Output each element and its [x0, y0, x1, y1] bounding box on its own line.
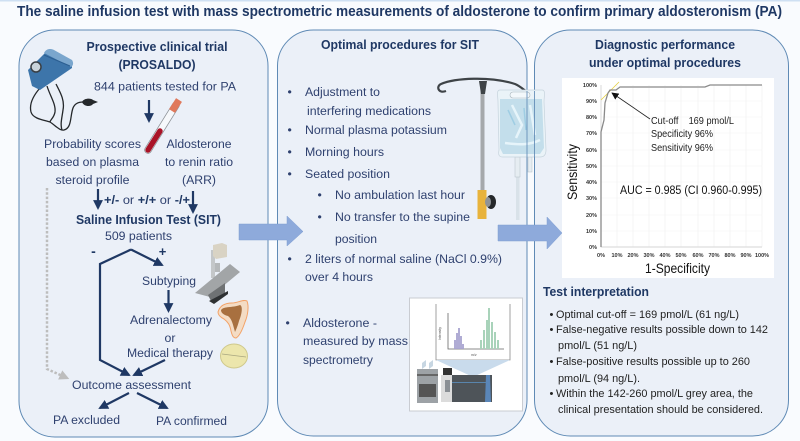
arrow: from trial to procedures	[239, 216, 303, 246]
callout: cut-off values: Cut-off 169 pmol/L	[651, 115, 734, 127]
y axis tick labels: 40%	[586, 180, 597, 186]
arrow: scores to SIT	[97, 189, 99, 208]
icon: imaging scanner table	[195, 243, 240, 304]
arrow: from procedures to performance	[498, 217, 562, 249]
list: mass spectrometry: measured by mass	[303, 334, 408, 348]
text: PA confirmed: PA confirmed	[156, 414, 227, 428]
icon: mass spectrometer and spectrum: Intensity	[438, 327, 442, 340]
text: aldosterone to renin ratio: (ARR)	[182, 173, 216, 187]
y axis tick labels: 10%	[586, 229, 597, 235]
list: test interpretation: •	[550, 388, 554, 400]
list: test interpretation: Within the 142-260 pmol/L grey area, the	[556, 388, 753, 400]
y axis tick labels: 50%	[586, 164, 597, 170]
text: probability scores: steroid profile	[56, 173, 130, 187]
text: probability scores: Probability scores	[44, 137, 141, 151]
list: mass spectrometry: •	[286, 316, 290, 330]
panel: prospective clinical trial	[19, 30, 268, 437]
list: procedure conditions: No ambulation last hour	[335, 188, 465, 202]
list: test interpretation: clinical presentation should be considered.	[558, 404, 763, 416]
x axis tick labels: 80%	[724, 253, 736, 259]
text: adrenalectomy or medical therapy: Adrenalectomy	[130, 313, 213, 327]
list: procedure conditions: •	[288, 123, 292, 137]
heading: prospective clinical trial: (PROSALDO)	[118, 58, 196, 72]
list: test interpretation	[550, 309, 768, 416]
list: procedure conditions: •	[318, 188, 322, 202]
x axis tick labels: 90%	[740, 253, 752, 259]
heading: prospective clinical trial: Prospective clinical trial	[86, 40, 228, 54]
text: outcome assessment: Outcome assessment	[72, 378, 192, 392]
arrow: to PA excluded	[100, 393, 129, 408]
list: procedure conditions: •	[288, 252, 292, 266]
icon: adrenal gland	[218, 300, 248, 338]
list: procedure conditions: position	[335, 232, 377, 246]
list: test interpretation: pmol/L (51 ng/L)	[558, 340, 637, 352]
list: procedure conditions: interfering medications	[307, 104, 431, 118]
ROC curve line	[601, 85, 762, 247]
text: result combinations: +/- or +/+ or -/+	[104, 193, 190, 207]
icon: IV stand and saline bag	[438, 79, 546, 220]
callout: cut-off values: Sensitivity 96%	[651, 142, 713, 154]
heading: diagnostic performance: under optimal procedures	[589, 56, 741, 70]
text: subtyping: Subtyping	[142, 274, 196, 288]
list: mass spectrometry: Aldosterone -	[303, 316, 377, 330]
list: test interpretation: •	[550, 309, 554, 321]
arrow: cut-off callout	[612, 93, 650, 119]
icon: mass spectrometer and spectrum	[410, 298, 522, 411]
list: test interpretation: Optimal cut-off = 169 pmol/L (61 ng/L)	[556, 309, 739, 321]
text: probability scores	[44, 137, 141, 187]
text: AUC: AUC = 0.985 (CI 0.960-0.995)	[620, 185, 762, 197]
heading: optimal procedures: Optimal procedures for SIT	[321, 38, 479, 52]
list: procedure conditions: over 4 hours	[305, 270, 373, 284]
x axis tick labels: 40%	[659, 253, 671, 259]
panel: optimal procedures for SIT	[278, 30, 527, 436]
heading: saline infusion test: Saline Infusion Test (SIT)	[76, 213, 221, 227]
text: minus sign: -	[91, 243, 96, 259]
list: procedure conditions: •	[288, 167, 292, 181]
arrow: SIT positive to subtyping	[131, 250, 162, 265]
list: procedure conditions	[288, 85, 502, 284]
axis label: 1-specificity: 1-Specificity	[645, 260, 710, 276]
arrow: screening negative, dotted	[47, 188, 67, 378]
heading: test interpretation: Test interpretation	[543, 284, 649, 299]
list: procedure conditions: No transfer to the supine	[335, 210, 470, 224]
tangent line at cut-off	[601, 82, 619, 100]
list: procedure conditions: 2 liters of normal saline (NaCl 0.9%)	[305, 252, 502, 266]
y axis tick labels: 20%	[586, 213, 597, 219]
arrow: SIT negative to outcome	[100, 250, 131, 375]
x axis tick labels: 50%	[675, 253, 687, 259]
callout: cut-off values	[651, 115, 734, 154]
list: procedure conditions: Morning hours	[305, 145, 384, 159]
icon: blood test tube	[148, 100, 179, 150]
text: adrenalectomy or medical therapy: Medical therapy	[127, 346, 214, 360]
text: plus sign: +	[159, 244, 167, 259]
icon: pill	[220, 344, 248, 368]
icon: mass spectrometer and spectrum: m/z	[471, 353, 477, 357]
arrow: subtyping to treatment	[167, 290, 170, 311]
y axis tick labels: 70%	[586, 131, 597, 137]
text: adrenalectomy or medical therapy: or	[165, 331, 175, 345]
text: aldosterone to renin ratio: Aldosterone	[166, 137, 232, 151]
list: mass spectrometry	[286, 316, 408, 367]
arrow: to scores	[148, 100, 150, 121]
x axis tick labels: 20%	[627, 253, 639, 259]
heading: diagnostic performance	[589, 38, 741, 70]
y axis tick labels: 90%	[586, 99, 597, 105]
chart: ROC curve	[562, 78, 774, 278]
list: procedure conditions: Adjustment to	[305, 85, 380, 99]
list: test interpretation: pmol/L (94 ng/L).	[558, 373, 640, 385]
list: mass spectrometry: spectrometry	[303, 353, 374, 367]
list: test interpretation: •	[550, 324, 554, 336]
y axis tick labels: 0%	[589, 245, 597, 251]
x axis tick labels: 60%	[692, 253, 704, 259]
callout: cut-off values: Specificity 96%	[651, 128, 713, 140]
text: adrenalectomy or medical therapy	[127, 313, 214, 360]
text: probability scores: based on plasma	[46, 155, 139, 169]
list: procedure conditions: Normal plasma potassium	[305, 123, 447, 137]
heading: prospective clinical trial	[86, 40, 228, 72]
x axis tick labels: 70%	[708, 253, 720, 259]
arrow: therapy to outcome	[134, 360, 165, 375]
x axis tick labels: 30%	[643, 253, 655, 259]
list: test interpretation: False-negative results possible down to 142	[556, 324, 768, 336]
list: procedure conditions: •	[288, 85, 292, 99]
y axis tick labels: 30%	[586, 196, 597, 202]
text: aldosterone to renin ratio	[165, 137, 233, 187]
arrow: ARR to SIT	[192, 191, 194, 212]
x axis tick labels	[597, 253, 769, 259]
text: PA excluded: PA excluded	[53, 413, 120, 427]
list: procedure conditions: •	[318, 210, 322, 224]
text: 509 patients: 509 patients	[105, 229, 172, 243]
y axis tick labels: 80%	[586, 115, 597, 121]
axis label: sensitivity: Sensitivity	[564, 144, 580, 200]
list: test interpretation: False-positive results possible up to 260	[556, 356, 750, 368]
list: procedure conditions: •	[288, 145, 292, 159]
x axis tick labels: 100%	[755, 253, 769, 259]
list: test interpretation: •	[550, 356, 554, 368]
y axis tick labels: 60%	[586, 148, 597, 154]
x axis tick labels: 0%	[597, 253, 605, 259]
icon: blood pressure cuff	[28, 49, 98, 130]
y axis tick labels	[583, 83, 597, 251]
text: aldosterone to renin ratio: to renin ratio	[165, 155, 233, 169]
list: procedure conditions: Seated position	[305, 167, 390, 181]
y axis tick labels: 100%	[583, 83, 597, 89]
panel: diagnostic performance	[534, 30, 788, 436]
arrow: to PA confirmed	[137, 393, 167, 408]
heading: diagnostic performance: Diagnostic performance	[595, 38, 735, 52]
text: 844 patients: 844 patients tested for PA	[94, 80, 237, 94]
x axis tick labels: 10%	[611, 253, 623, 259]
